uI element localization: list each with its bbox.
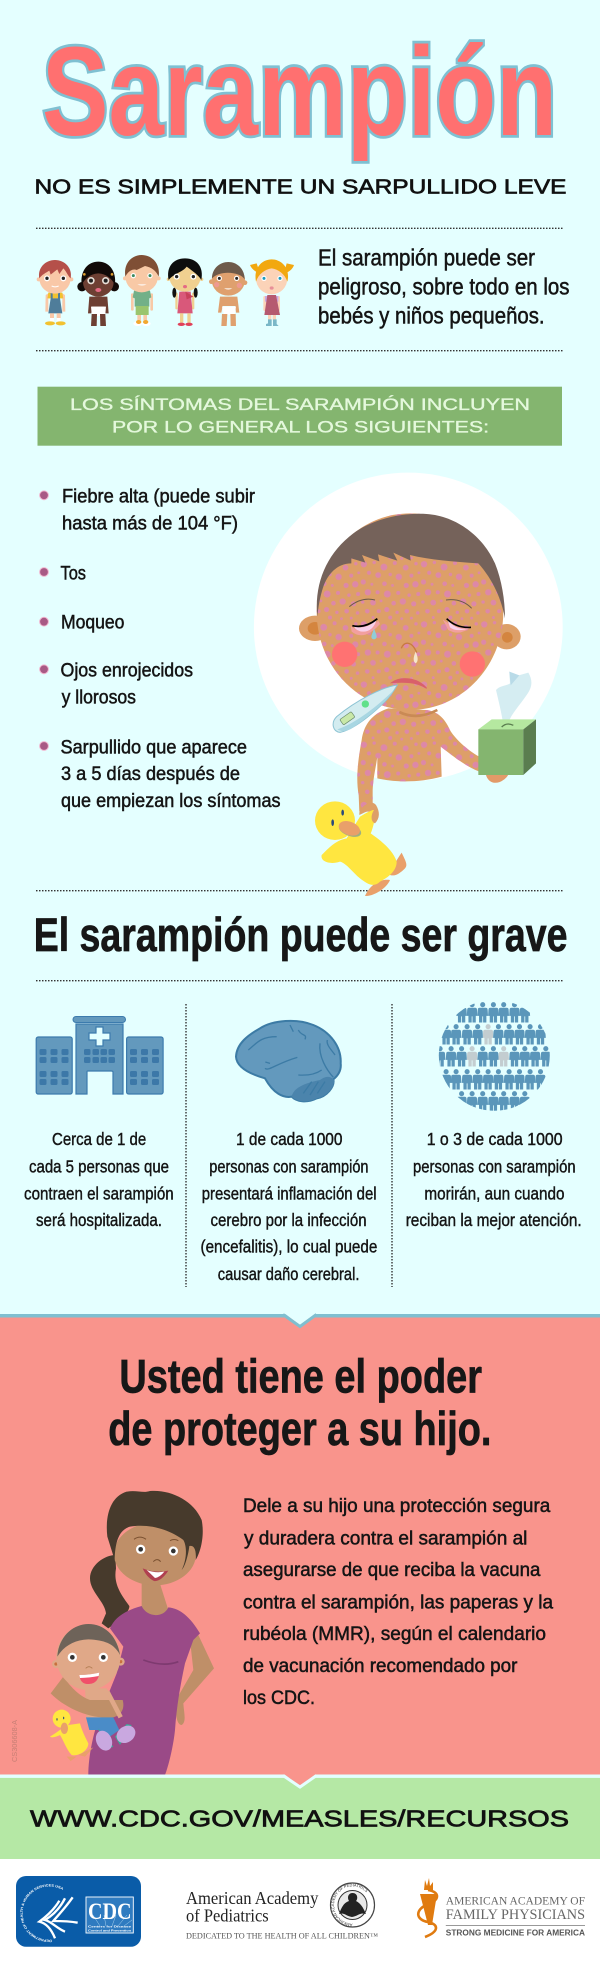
- panel: logos: [0, 1859, 600, 1965]
- mother shirt: [88, 1606, 200, 1775]
- mother eyes and smile: [134, 1537, 178, 1581]
- logo: CDC and HHS: [16, 1876, 141, 1947]
- icon: circle of people: [435, 1002, 551, 1111]
- panel: measles can be serious: [24, 909, 582, 1287]
- symptom: red eyes: [40, 660, 193, 708]
- mother hair: [107, 1491, 203, 1570]
- url: WWW.CDC.GOV/MEASLES/RECURSOS: [30, 1806, 569, 1832]
- symptom: cough: Tos: [60, 562, 86, 584]
- heading: de proteger a su hijo.: [108, 1402, 491, 1455]
- symptom: rash: 3 a 5 días después de: [61, 763, 240, 785]
- panel: symptoms: [36, 387, 563, 896]
- text: hospitalization: contraen el sarampión: [24, 1183, 174, 1203]
- CDC mark: CDC: [88, 1899, 132, 1924]
- child 6: [250, 259, 294, 326]
- child 4: [167, 258, 203, 326]
- symptom: runny nose: Moqueo: [61, 611, 124, 633]
- text: encephalitis: (encefalitis), lo cual puede: [200, 1237, 377, 1257]
- caduceus: [418, 1878, 437, 1937]
- panel: protect your child: [0, 1313, 600, 1775]
- text: hospitalization: [24, 1129, 174, 1230]
- symptom: fever: [40, 486, 255, 534]
- paragraph: los CDC.: [243, 1687, 315, 1709]
- text: hospitalization: cada 5 personas que: [29, 1156, 169, 1176]
- logo: American Academy of Pediatrics: AMERICAN ACADEMY OF PEDIATRICS: [331, 1884, 368, 1926]
- illustration: sick boy with thermometer, tissues and duck: [299, 513, 536, 896]
- text: encephalitis: cerebro por la infección: [210, 1210, 367, 1230]
- small duck: [50, 1710, 93, 1761]
- child 1: [37, 260, 73, 325]
- icon: six children: [37, 255, 294, 326]
- tissue box: [478, 672, 536, 775]
- paragraph: y duradera contra el sarampión al: [244, 1527, 527, 1549]
- intro text: El sarampión puede ser: [318, 245, 535, 271]
- duck: [315, 801, 406, 896]
- paragraph: [243, 1495, 553, 1709]
- HHS eagle seal: DEPARTMENT OF HEALTH & HUMAN SERVICES USA: [20, 1884, 63, 1942]
- paragraph: contra el sarampión, las paperas y la: [243, 1591, 553, 1613]
- child 3: [123, 255, 161, 326]
- text: deaths: 1 o 3 de cada 1000: [427, 1129, 563, 1149]
- child torso: [85, 1688, 122, 1720]
- arm holding child: [51, 1677, 123, 1718]
- intro text: [318, 245, 570, 328]
- symptom: red eyes: y llorosos: [62, 686, 136, 708]
- symptom: rash: [40, 736, 281, 812]
- logo: American Academy of Family Physicians: AMERICAN ACADEMY OF: [446, 1895, 585, 1907]
- CDC mark: Control and Prevention: [88, 1928, 131, 1932]
- text: encephalitis: personas con sarampión: [209, 1156, 368, 1176]
- panel: header: [34, 21, 570, 351]
- text: deaths: personas con sarampión: [413, 1156, 576, 1176]
- symptom: runny nose: [40, 611, 124, 633]
- CDC mark: Centers for Disease: [88, 1924, 131, 1928]
- child head: [52, 1624, 125, 1690]
- notch arrow: [283, 1313, 316, 1326]
- boy eyes: [349, 599, 472, 639]
- logo: American Academy of Family Physicians: STRONG MEDICINE FOR AMERICA: [446, 1928, 585, 1937]
- symptom: fever: Fiebre alta (puede subir: [62, 486, 255, 508]
- logo: American Academy of Pediatrics: of Pediatrics: [186, 1906, 269, 1926]
- publication code: CS306608-A: [10, 1720, 19, 1762]
- illustration: mother holding child: [50, 1491, 214, 1775]
- paragraph: rubéola (MMR), según el calendario: [243, 1623, 546, 1645]
- logo: American Academy of Pediatrics: American Academy: [186, 1888, 318, 1908]
- text: deaths: reciban la mejor atención.: [406, 1210, 582, 1230]
- paragraph: de vacunación recomendado por: [243, 1655, 518, 1677]
- child 5: [209, 262, 247, 326]
- text: hospitalization: será hospitalizada.: [36, 1210, 162, 1230]
- text: hospitalization: Cerca de 1 de: [52, 1129, 146, 1149]
- mother neck: [142, 1580, 168, 1615]
- logo: American Academy of Family Physicians: [418, 1878, 585, 1937]
- boy ears: [299, 616, 521, 649]
- text: encephalitis: 1 de cada 1000: [236, 1129, 342, 1149]
- text: deaths: morirán, aun cuando: [424, 1183, 564, 1203]
- CDC mark: [86, 1897, 133, 1933]
- symptom: fever: hasta más de 104 °F): [62, 512, 238, 534]
- icon: brain: [236, 1021, 341, 1101]
- paragraph: Dele a su hijo una protección segura: [243, 1495, 550, 1517]
- text: encephalitis: [200, 1129, 377, 1284]
- symptom: rash: que empiezan los síntomas: [61, 790, 281, 812]
- logo: American Academy of Family Physicians: FAMILY PHYSICIANS: [446, 1907, 585, 1923]
- logo: American Academy of Pediatrics: DEDICATED TO THE HEALTH OF ALL CHILDREN™: [186, 1932, 378, 1941]
- symptom: red eyes: Ojos enrojecidos: [60, 660, 193, 682]
- heading: Usted tiene el poder: [119, 1349, 482, 1402]
- boy hand on duck: [359, 803, 379, 823]
- ponytail: [90, 1555, 129, 1628]
- boy mouth: [392, 679, 427, 688]
- green banner: [38, 387, 562, 446]
- logo: American Academy of Pediatrics: [186, 1882, 378, 1941]
- boy body: [357, 708, 509, 812]
- green banner: LOS SÍNTOMAS DEL SARAMPIÓN INCLUYEN: [70, 395, 530, 414]
- text: deaths: [406, 1129, 582, 1230]
- boy nose: [401, 643, 418, 663]
- icon: hospital: [36, 1016, 163, 1094]
- panel: website: [0, 1774, 600, 1859]
- symptoms list: [40, 486, 281, 812]
- mother arm: [176, 1635, 214, 1725]
- text: encephalitis: causar daño cerebral.: [218, 1264, 359, 1284]
- mother face: [114, 1523, 196, 1585]
- boy head: [317, 513, 503, 710]
- white circle backdrop: [254, 473, 563, 781]
- child 2: [77, 262, 119, 326]
- paragraph: asegurarse de que reciba la vacuna: [243, 1559, 540, 1581]
- notch arrow: [283, 1774, 316, 1787]
- green banner: POR LO GENERAL LOS SIGUIENTES:: [112, 417, 489, 436]
- symptom: rash: Sarpullido que aparece: [60, 736, 247, 758]
- intro text: bebés y niños pequeños.: [318, 302, 545, 328]
- text: encephalitis: presentará inflamación del: [202, 1183, 377, 1203]
- symptom: cough: [40, 562, 86, 584]
- thermometer: [333, 685, 397, 732]
- boy hair: [317, 514, 505, 618]
- subtitle: NO ES SIMPLEMENTE UN SARPULLIDO LEVE: [34, 177, 566, 199]
- child jeans and shoes: [86, 1717, 139, 1753]
- boy cheeks: [332, 642, 485, 677]
- heading: [108, 1349, 491, 1455]
- intro text: peligroso, sobre todo en los: [318, 274, 570, 300]
